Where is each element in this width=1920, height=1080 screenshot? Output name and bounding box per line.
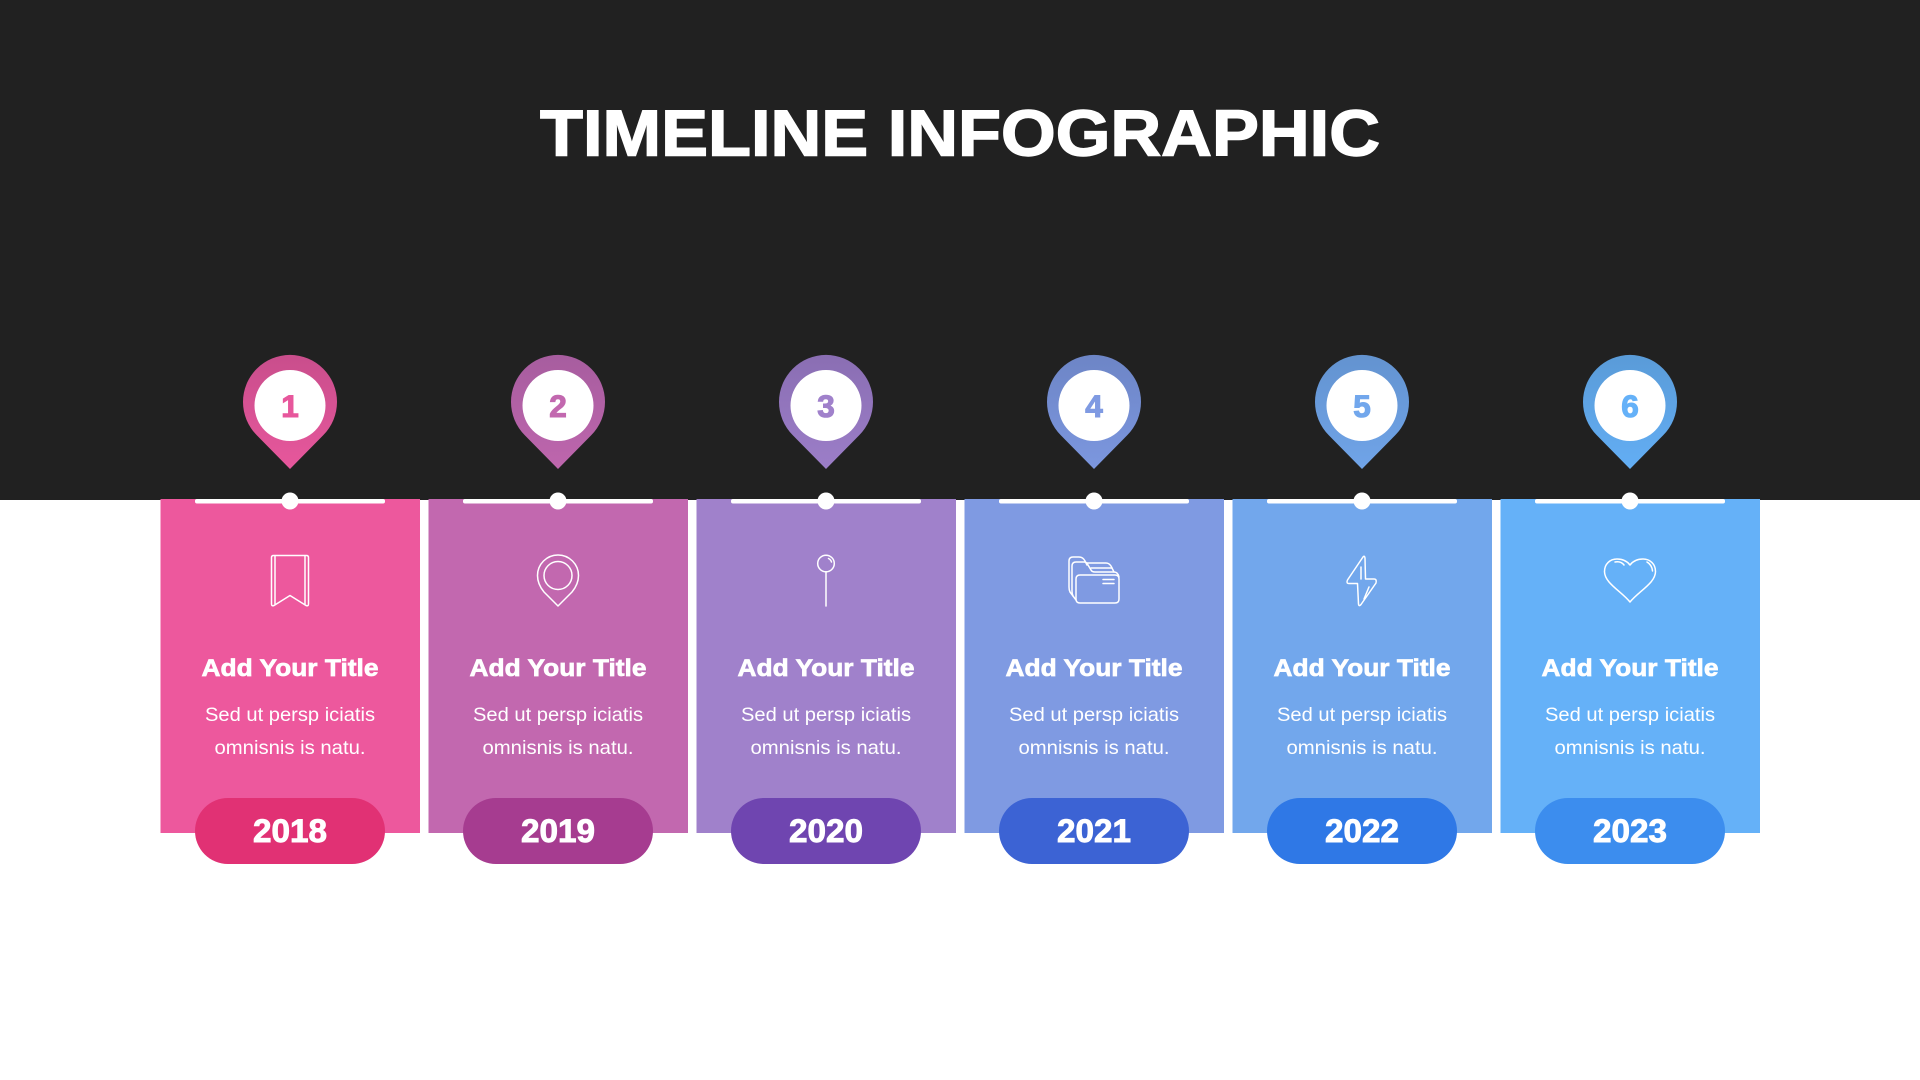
icon: lightning bolt	[1347, 556, 1376, 606]
card 2 body text: Sed ut persp iciatis	[473, 704, 643, 726]
map pin 1: 1	[281, 388, 299, 424]
card 6 heading: Add Your Title	[1542, 655, 1718, 682]
timeline step 3: 2020	[696, 355, 956, 864]
connector line 3	[731, 499, 921, 504]
year pill 2022: 2022	[1325, 813, 1399, 849]
card 4 body text: Sed ut persp iciatis	[1009, 704, 1179, 726]
card 6 body text: omnisnis is natu.	[1554, 737, 1706, 759]
card 3 heading: Add Your Title	[738, 655, 914, 682]
card 2 panel	[428, 499, 688, 833]
year pill 2020: 2020	[789, 813, 863, 849]
connector dot 3	[818, 492, 834, 510]
timeline step 1: 2018	[160, 355, 420, 864]
year pill 2022	[1267, 798, 1457, 864]
card 5 body text	[1277, 704, 1447, 759]
map pin 2	[511, 355, 605, 469]
card 3 panel	[696, 499, 956, 833]
title: TIMELINE INFOGRAPHIC	[540, 96, 1380, 170]
year pill 2023	[1535, 798, 1725, 864]
connector line 2	[463, 499, 653, 504]
connector dot 5	[1354, 492, 1370, 510]
year pill 2018	[195, 798, 385, 864]
card 1 heading: Add Your Title	[202, 655, 378, 682]
card 1 body text	[205, 704, 375, 759]
card 6 panel	[1500, 499, 1760, 833]
card 4 heading: Add Your Title	[1006, 655, 1182, 682]
card 2 body text	[473, 704, 643, 759]
card 5 body text: Sed ut persp iciatis	[1277, 704, 1447, 726]
card 4 body text: omnisnis is natu.	[1018, 737, 1170, 759]
icon: folders	[1069, 557, 1119, 603]
card 3 body text: Sed ut persp iciatis	[741, 704, 911, 726]
icon: bookmark	[272, 556, 308, 606]
year pill 2021	[999, 798, 1189, 864]
card 2 heading: Add Your Title	[470, 655, 646, 682]
map pin 2: 2	[549, 388, 567, 424]
connector line 1	[195, 499, 385, 504]
year pill 2023: 2023	[1593, 813, 1667, 849]
timeline step 5: 2022	[1232, 355, 1492, 864]
dark header band	[0, 0, 1920, 500]
connector line 4	[999, 499, 1189, 504]
card 3 body text	[741, 704, 911, 759]
card 1 body text: omnisnis is natu.	[214, 737, 366, 759]
timeline step 2: 2019	[428, 355, 688, 864]
year pill 2021: 2021	[1057, 813, 1131, 849]
timeline step 6: 2023	[1500, 355, 1760, 864]
card 5 heading: Add Your Title	[1274, 655, 1450, 682]
connector dot 2	[550, 492, 566, 510]
connector line 5	[1267, 499, 1457, 504]
card 4 panel	[964, 499, 1224, 833]
timeline step 4: 2021	[964, 355, 1224, 864]
card 5 body text: omnisnis is natu.	[1286, 737, 1438, 759]
card 4 body text	[1009, 704, 1179, 759]
card 6 body text: Sed ut persp iciatis	[1545, 704, 1715, 726]
year pill 2019: 2019	[521, 813, 595, 849]
icon: heart	[1604, 559, 1656, 602]
connector dot 1	[282, 492, 298, 510]
card 3 body text: omnisnis is natu.	[750, 737, 902, 759]
year pill 2018: 2018	[253, 813, 327, 849]
icon: location pin	[538, 555, 578, 606]
icon: round push pin	[818, 555, 834, 606]
card 1 body text: Sed ut persp iciatis	[205, 704, 375, 726]
map pin 4	[1047, 355, 1141, 469]
card 6 body text	[1545, 704, 1715, 759]
card 2 body text: omnisnis is natu.	[482, 737, 634, 759]
map pin 5	[1315, 355, 1409, 469]
card 1 panel	[160, 499, 420, 833]
map pin 4: 4	[1085, 388, 1103, 424]
map pin 3	[779, 355, 873, 469]
year pill 2019	[463, 798, 653, 864]
connector dot 6	[1622, 492, 1638, 510]
map pin 1	[243, 355, 337, 469]
card 5 panel	[1232, 499, 1492, 833]
map pin 6: 6	[1621, 388, 1639, 424]
map pin 6	[1583, 355, 1677, 469]
year pill 2020	[731, 798, 921, 864]
connector dot 4	[1086, 492, 1102, 510]
map pin 5: 5	[1353, 388, 1371, 424]
map pin 3: 3	[817, 388, 835, 424]
connector line 6	[1535, 499, 1725, 504]
